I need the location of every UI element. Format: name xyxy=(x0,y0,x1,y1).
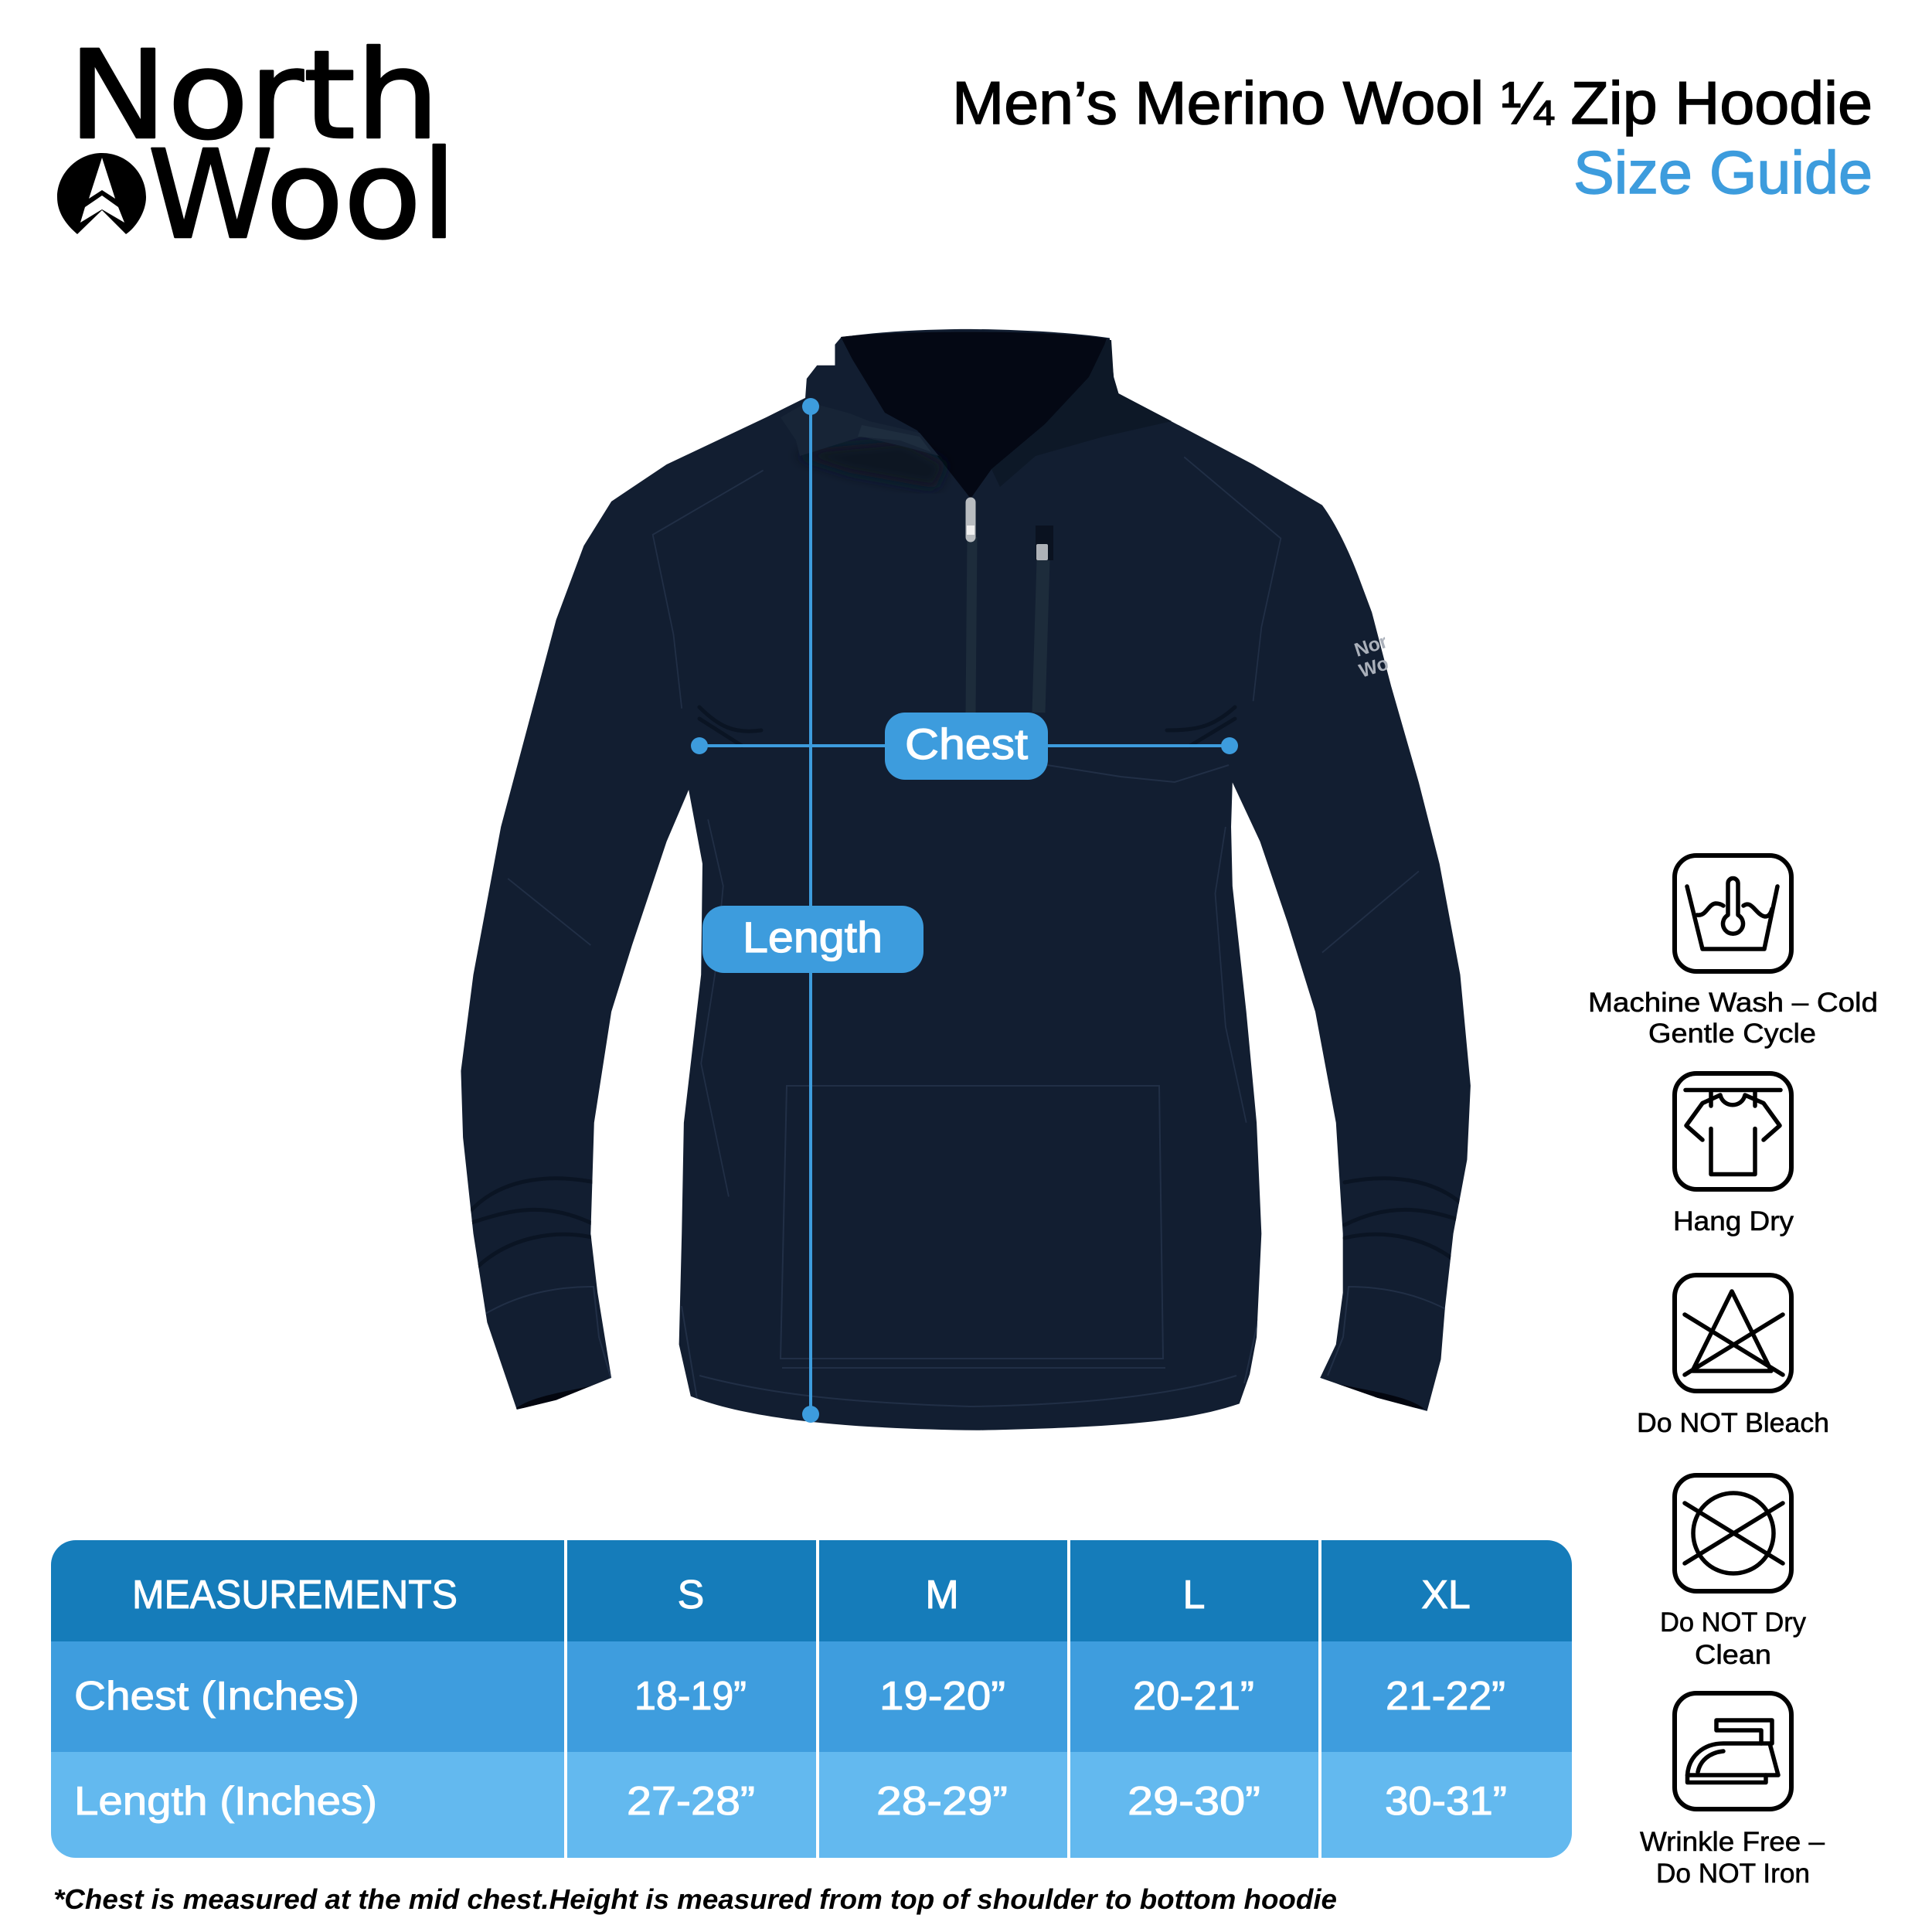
pocket zipper xyxy=(1036,526,1053,713)
logo wordmark: North: North xyxy=(68,25,440,167)
sleeve logo: North xyxy=(1352,624,1407,662)
hem stitching xyxy=(682,1306,1261,1406)
care: do not iron xyxy=(1640,1693,1825,1889)
icon: hanging shirt xyxy=(1675,1073,1791,1189)
label: do not dry clean: Clean xyxy=(1695,1639,1771,1670)
length measure line xyxy=(802,398,819,1423)
label: machine wash: Gentle Cycle xyxy=(1648,1018,1816,1049)
label: machine wash: Machine Wash – Cold xyxy=(1588,987,1878,1018)
hoodie illustration xyxy=(461,329,1471,1430)
hoodie body xyxy=(461,329,1471,1430)
table row: length: 28-29” xyxy=(876,1779,1008,1824)
size table xyxy=(51,1540,1572,1858)
table header row: S xyxy=(678,1573,704,1617)
table rows background xyxy=(51,1540,1572,1858)
table row: chest: 20-21” xyxy=(1133,1674,1254,1719)
chest label xyxy=(885,713,1048,780)
care: do not bleach xyxy=(1637,1275,1829,1438)
title: Men’s Merino Wool ¼ Zip Hoodie xyxy=(952,69,1872,137)
table row: chest: 18-19” xyxy=(634,1674,747,1719)
table header row: MEASUREMENTS xyxy=(132,1573,457,1617)
care: do not dry clean xyxy=(1660,1475,1806,1670)
chest label: Chest xyxy=(905,719,1028,768)
armpit wrinkles xyxy=(699,707,1235,746)
left hood flap shadow xyxy=(796,440,947,488)
kangaroo pocket xyxy=(781,1086,1165,1368)
shoulder and sleeve seams xyxy=(508,457,1419,1196)
table row: length: 27-28” xyxy=(627,1779,755,1824)
cuff seams xyxy=(485,1287,1454,1379)
table row: length: 30-31” xyxy=(1385,1779,1507,1824)
chest measure line xyxy=(691,737,1238,754)
icon: logo arrow emblem xyxy=(57,153,146,234)
table header row: M xyxy=(925,1573,959,1617)
footnote: *Chest is measured at the mid chest.Height is measured from top of shoulder to bottom hoodie xyxy=(53,1883,1337,1915)
icon: crossed circle xyxy=(1675,1475,1791,1591)
fabric wrinkles xyxy=(468,707,1471,1409)
icon: wash tub xyxy=(1675,855,1791,971)
label: do not dry clean xyxy=(1660,1607,1806,1670)
label: hang dry: Hang Dry xyxy=(1673,1206,1794,1236)
label: do not bleach: Do NOT Bleach xyxy=(1637,1407,1829,1438)
right hood shadow xyxy=(992,340,1172,487)
lower chest pocket seam xyxy=(1047,765,1229,782)
table row: length xyxy=(74,1779,1507,1824)
table header row xyxy=(132,1573,1471,1617)
sleeve logo xyxy=(1354,637,1388,677)
label: do not dry clean: Do NOT Dry xyxy=(1660,1607,1806,1638)
label: do not iron xyxy=(1640,1826,1825,1889)
table row: chest: 19-20” xyxy=(879,1674,1005,1719)
left hood flap xyxy=(781,402,939,456)
sleeve wrinkles xyxy=(468,1179,1471,1267)
icon: iron xyxy=(1675,1693,1791,1809)
subtitle: Size Guide: Size Guide xyxy=(1573,138,1872,206)
table header row: L xyxy=(1183,1573,1205,1617)
table row: chest: Chest (Inches) xyxy=(74,1674,359,1719)
table header row: XL xyxy=(1421,1573,1471,1617)
table row: chest: 21-22” xyxy=(1386,1674,1505,1719)
sleeve logo: Wool xyxy=(1356,647,1408,682)
length label: Length xyxy=(743,913,883,961)
care: machine wash xyxy=(1588,855,1878,1049)
chest zipper xyxy=(967,502,975,713)
table row: length: Length (Inches) xyxy=(74,1779,377,1824)
table row: chest xyxy=(74,1674,1505,1719)
left hood band xyxy=(858,425,931,452)
cuff openings xyxy=(515,1382,1424,1409)
label: do not iron: Wrinkle Free – xyxy=(1640,1826,1825,1857)
logo: North Wool xyxy=(57,25,457,267)
care: hang dry xyxy=(1673,1073,1794,1236)
length label xyxy=(702,906,923,973)
label: machine wash xyxy=(1588,987,1878,1049)
logo wordmark: Wool: Wool xyxy=(148,124,457,267)
hood interior collar xyxy=(841,332,1107,498)
icon: crossed triangle xyxy=(1675,1275,1791,1391)
label: do not iron: Do NOT Iron xyxy=(1656,1858,1810,1889)
table row: length: 29-30” xyxy=(1128,1779,1260,1824)
